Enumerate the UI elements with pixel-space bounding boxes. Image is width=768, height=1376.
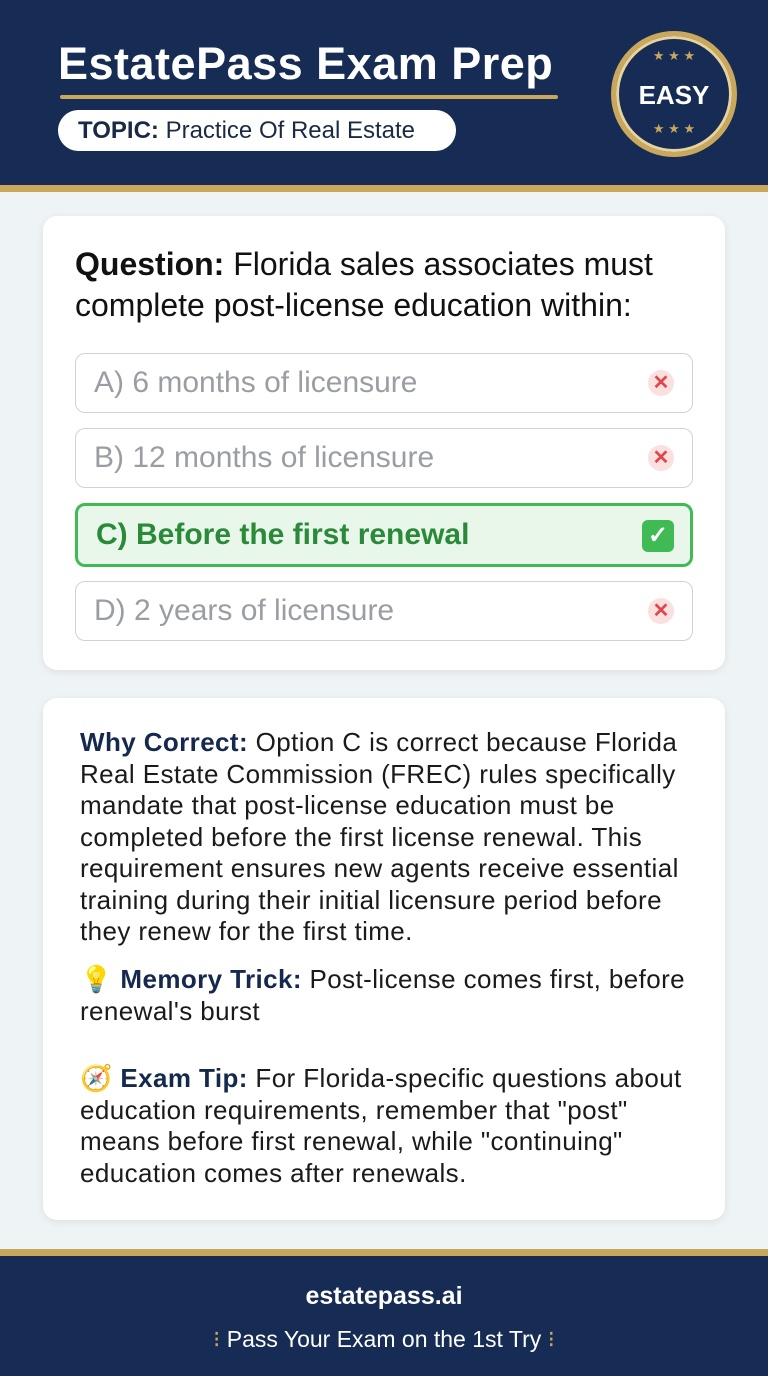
exam tip: 🧭 Exam Tip: For Florida-specific questions about bbox=[80, 1063, 682, 1093]
why correct: they renew for the first time. bbox=[80, 916, 413, 946]
exam tip: means before first renewal, while "continuing" bbox=[80, 1126, 623, 1156]
why correct bbox=[80, 727, 679, 946]
why correct: Why Correct: Option C is correct because Florida bbox=[80, 727, 677, 757]
memory trick: 💡 Memory Trick: Post-license comes first, before bbox=[80, 964, 685, 994]
title underline bbox=[60, 95, 558, 99]
why correct: completed before the first license renewal. This bbox=[80, 822, 642, 852]
difficulty badge: ★ ★ ★ bbox=[653, 48, 695, 63]
option B: ✕ bbox=[653, 447, 669, 469]
why correct: mandate that post-license education must be bbox=[80, 790, 615, 820]
footer tagline: ⁝ Pass Your Exam on the 1st Try ⁝ bbox=[213, 1326, 555, 1352]
difficulty badge: EASY bbox=[639, 80, 709, 110]
why correct: requirement ensures new agents receive essential bbox=[80, 853, 679, 883]
option C correct: C) Before the first renewal bbox=[96, 518, 469, 551]
topic pill bbox=[58, 110, 456, 151]
memory trick: renewal's burst bbox=[80, 996, 260, 1026]
question text: Question: Florida sales associates must complete post-license education within: bbox=[75, 246, 653, 323]
option A: ✕ bbox=[653, 372, 669, 394]
header bbox=[0, 0, 768, 186]
option B bbox=[75, 428, 693, 488]
footer bbox=[0, 1249, 768, 1376]
why correct: Real Estate Commission (FREC) rules specifically bbox=[80, 758, 676, 788]
difficulty badge bbox=[611, 31, 737, 157]
option C correct bbox=[75, 503, 693, 567]
option D: ✕ bbox=[653, 600, 669, 622]
option A bbox=[75, 353, 693, 413]
option A: A) 6 months of licensure bbox=[94, 366, 417, 399]
option D: D) 2 years of licensure bbox=[94, 594, 394, 627]
option D bbox=[75, 581, 693, 641]
memory trick bbox=[80, 964, 685, 1026]
exam tip: education requirements, remember that "post" bbox=[80, 1094, 628, 1124]
difficulty badge: ★ ★ ★ bbox=[653, 121, 695, 136]
panel: question card bbox=[43, 216, 725, 670]
option C correct: ✓ bbox=[648, 522, 668, 549]
option B: B) 12 months of licensure bbox=[94, 441, 434, 474]
topic pill: TOPIC: Practice Of Real Estate bbox=[78, 117, 415, 144]
footer url: estatepass.ai bbox=[305, 1282, 463, 1310]
why correct: training during their initial licensure period before bbox=[80, 884, 662, 914]
exam tip: education comes after renewals. bbox=[80, 1158, 467, 1188]
exam tip bbox=[80, 1063, 682, 1188]
panel: explanation card bbox=[43, 698, 725, 1220]
title: EstatePass Exam Prep bbox=[58, 38, 553, 89]
